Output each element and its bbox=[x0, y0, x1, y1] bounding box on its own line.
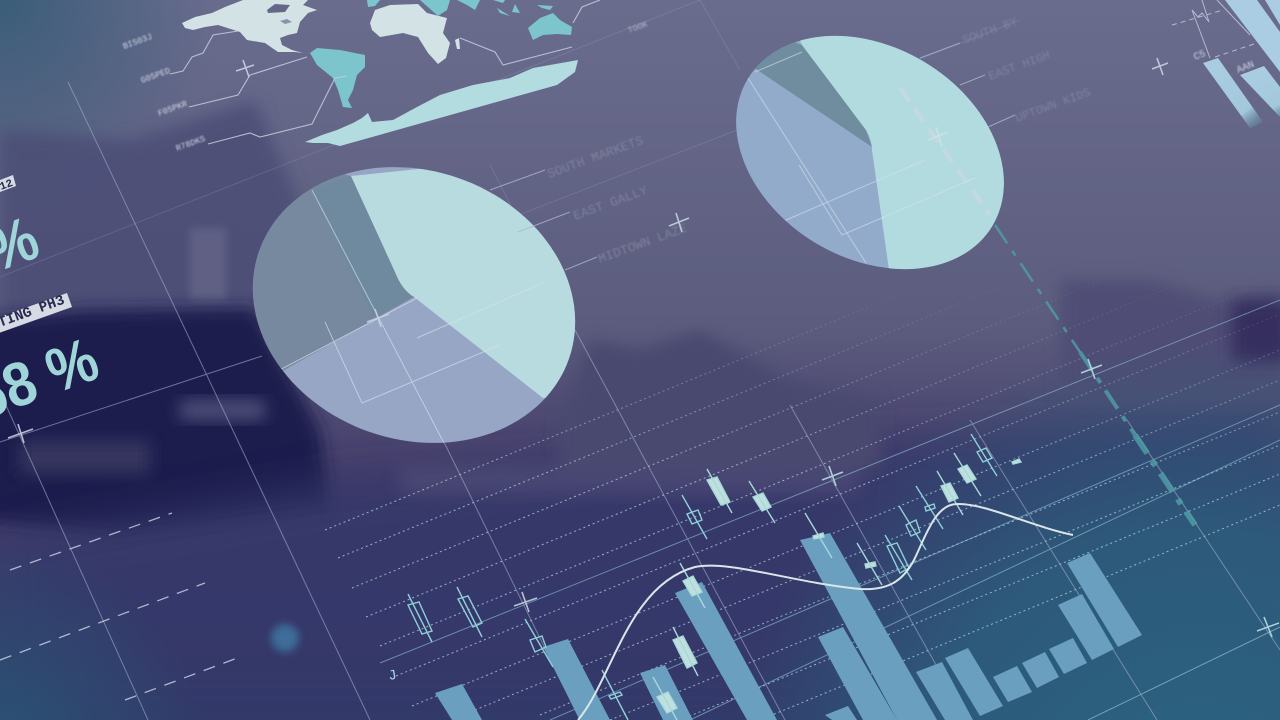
bar chart bbox=[435, 533, 1142, 720]
pie inner lines bbox=[270, 190, 545, 445]
leader lines bbox=[170, 0, 600, 144]
pie legend labels: SOUTH MARKETS bbox=[545, 133, 646, 182]
continent: Africa bbox=[370, 4, 450, 64]
pie legend labels: EAST HIGH bbox=[987, 48, 1052, 84]
continent: Australia bbox=[528, 13, 572, 40]
slice: pale teal bbox=[351, 168, 576, 398]
candlestick chart bbox=[408, 434, 1021, 720]
pie chart: left bbox=[240, 133, 690, 460]
pie chart: right bbox=[720, 15, 1093, 280]
map labels: G05PED bbox=[140, 66, 172, 86]
mini bars bbox=[1203, 58, 1263, 128]
island: Madagascar bbox=[455, 38, 460, 49]
map labels: BI503J bbox=[122, 32, 154, 52]
trend curve bbox=[578, 504, 1073, 720]
pie leader lines bbox=[490, 170, 597, 270]
grid lines: faint upper bbox=[0, 0, 1020, 330]
pie legend labels: MIDTOWN LAZE bbox=[596, 221, 690, 267]
left dashed lines bbox=[0, 513, 240, 700]
pie inner lines bbox=[748, 52, 975, 263]
mini line and dashes bbox=[1172, 0, 1257, 58]
pie legend labels bbox=[545, 133, 690, 267]
continent: Antarctica bbox=[305, 60, 578, 146]
mini labels: C5 bbox=[1192, 49, 1208, 64]
top right mini chart bbox=[1172, 0, 1280, 128]
axis glyph: J bbox=[387, 668, 398, 685]
world map with leader lines bbox=[122, 0, 650, 154]
pink dashed overlay bbox=[900, 88, 990, 215]
hollow candles bbox=[408, 434, 997, 720]
pie leader lines bbox=[920, 43, 1015, 127]
left stat block bbox=[0, 175, 107, 433]
map labels: R78DKS bbox=[175, 134, 207, 154]
mini labels: AAN bbox=[1235, 60, 1256, 77]
slice: lavender bbox=[252, 167, 576, 443]
pie legend labels bbox=[961, 15, 1093, 126]
map labels: TOOK bbox=[627, 19, 650, 36]
teal dashed axis bbox=[995, 225, 1195, 525]
slice: pale teal bbox=[800, 36, 1004, 270]
map labels bbox=[122, 19, 650, 154]
crosshair markers bbox=[8, 58, 1279, 637]
map labels: F05PKR bbox=[157, 99, 189, 119]
pie legend labels: EAST GALLY bbox=[571, 183, 650, 224]
continent: North America bbox=[182, 0, 317, 53]
continent: South America bbox=[310, 48, 365, 108]
solid candles bbox=[653, 453, 1021, 720]
mini labels bbox=[1192, 49, 1256, 77]
continent: Europe and Asia pieces bbox=[367, 0, 553, 16]
pie legend labels: SOUTH BY bbox=[961, 15, 1020, 48]
slice: lavender bbox=[736, 36, 1004, 270]
slice: slate bbox=[756, 42, 872, 147]
glowing blue dot bbox=[271, 624, 299, 652]
slice: slate bbox=[240, 150, 414, 395]
dotted chart gridlines bbox=[325, 281, 1280, 720]
slice: darker strip bbox=[351, 176, 414, 315]
pie legend labels: UPTOWN KIDS bbox=[1014, 86, 1093, 126]
